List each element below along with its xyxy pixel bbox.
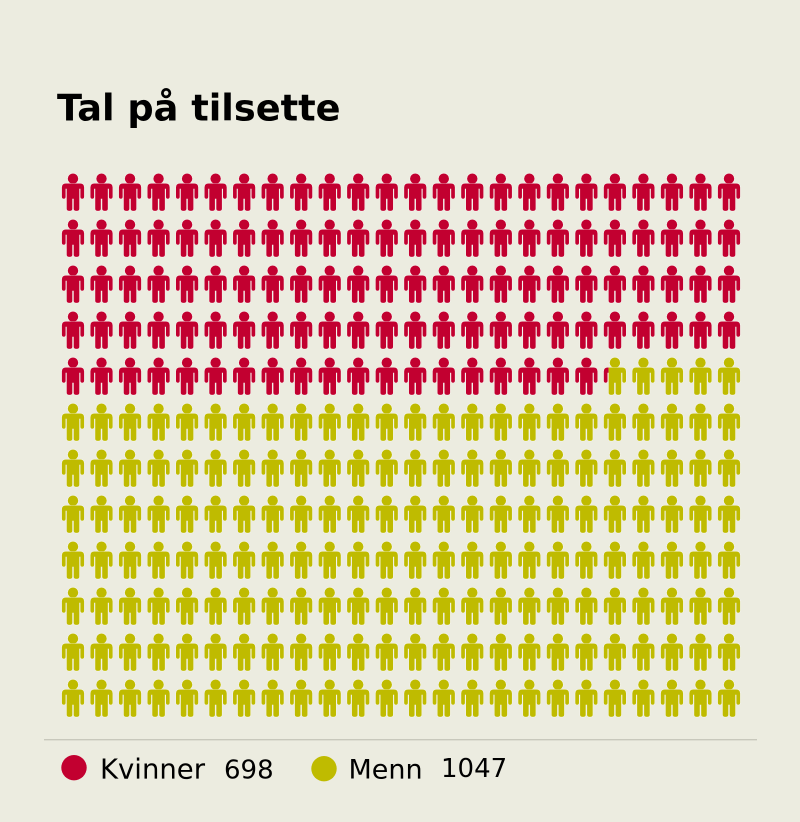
- row 7: men: [62, 450, 740, 487]
- title: Tal på tilsette: [57, 86, 341, 130]
- label: Menn: Menn: [348, 754, 423, 786]
- row 8: men: [62, 496, 740, 533]
- pictogram chart: 288 person icons: [62, 174, 740, 717]
- row 3: women: [62, 266, 740, 303]
- value: 698: 698: [224, 756, 274, 786]
- icon: yellow dot: [311, 756, 337, 781]
- row 2: women: [62, 220, 740, 257]
- row 10: men: [62, 588, 740, 625]
- legend: men: [311, 754, 507, 786]
- icon: red dot: [61, 755, 87, 780]
- row 12: men: [62, 680, 740, 717]
- legend: [61, 754, 507, 786]
- legend: women: [61, 754, 274, 786]
- label: Kvinner: Kvinner: [100, 754, 206, 786]
- row 11: men: [62, 634, 740, 671]
- row 5: women and men, split inside the 20th icon: [62, 358, 740, 395]
- value: 1047: 1047: [441, 754, 507, 784]
- row 9: men: [62, 542, 740, 579]
- row 4: women: [62, 312, 740, 349]
- row 6: men: [62, 404, 740, 441]
- row 1: women: [62, 174, 740, 211]
